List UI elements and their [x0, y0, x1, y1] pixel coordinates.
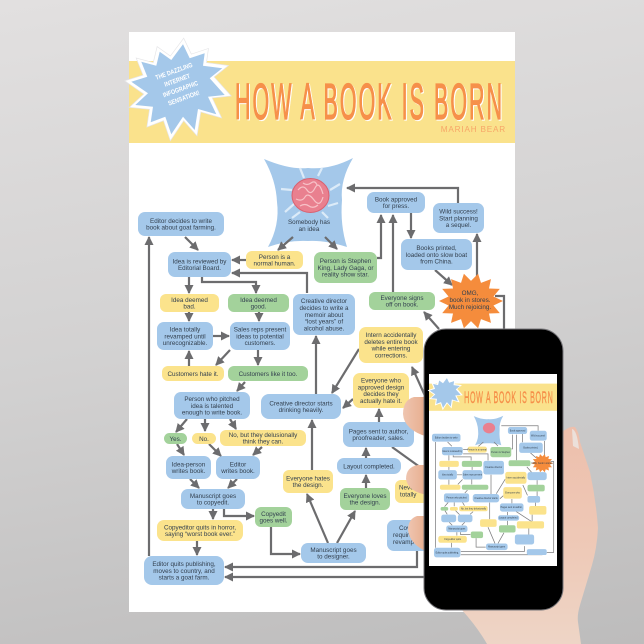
box: books printed: loaded onto slow boat — [406, 252, 467, 259]
box: copyedit well — [255, 507, 292, 527]
arrow: bad to revamp — [188, 312, 190, 321]
badge text — [155, 62, 203, 109]
box: idea-person writes: writes book. — [171, 468, 206, 475]
arrow: revamp to sales reps — [213, 335, 229, 337]
arrow: delusional to editor writes — [253, 447, 262, 455]
starburst: book in stores: OMG, — [462, 290, 479, 297]
box: everyone hates — [283, 470, 333, 493]
box: idea good: Idea deemed — [240, 297, 277, 304]
arrow: creative director back to review — [232, 273, 307, 293]
phone screen: mini poster: Everyone who — [505, 492, 521, 494]
box: delusional: No, but they delusionally — [229, 432, 298, 439]
box: idea revamped: revamped until — [164, 333, 206, 340]
palm and thumb — [462, 427, 598, 644]
phone screen: mini poster: Copyeditor quits — [444, 538, 462, 541]
box: books printed: from China. — [420, 259, 453, 266]
badge text: INTERNET — [164, 73, 191, 89]
box: cover (partly hidden) — [387, 520, 447, 551]
starburst badge — [125, 38, 231, 141]
box: goat farm: moves to country, and — [153, 568, 215, 575]
box: wild success: Wild success! — [439, 208, 478, 216]
box: memoir: decides to write a — [299, 305, 349, 312]
box: editor decides: Editor decides to write — [150, 218, 212, 225]
arrow: signs off to approved — [392, 215, 394, 292]
box: editor decides — [138, 212, 224, 236]
starburst: book in stores: book in stores. — [450, 297, 491, 304]
phone screen: mini poster: Creative director — [485, 466, 502, 469]
title: HOW A BOOK IS BORN — [236, 76, 505, 132]
box: editorial board: Idea is reviewed by — [173, 258, 227, 265]
phone screen: mini poster: HOW A BOOK IS BORN — [464, 387, 553, 407]
box: books printed — [401, 239, 472, 270]
arrow: burst to normal human — [278, 237, 293, 250]
box: pages sent: proofreader, sales. — [352, 435, 405, 442]
box: signs off: off on book. — [386, 302, 419, 309]
box: designer — [301, 543, 366, 563]
title: HOW A BOOK IS BORN — [235, 75, 504, 131]
arrow: manuscript to copyeditor quits — [212, 509, 214, 519]
box: intern: Intern accidentally — [366, 332, 417, 339]
arrow: pitcher to yes — [176, 419, 187, 432]
box: approved for press: for press. — [383, 203, 409, 210]
box: yes: Yes. — [169, 436, 182, 443]
box: everyone loves — [340, 488, 390, 510]
box: idea good — [228, 294, 289, 312]
arrow: pitcher to no — [204, 419, 206, 431]
phone screen: mini poster: Manuscript goes — [488, 545, 506, 548]
box: pitcher talented: Person who pitched — [184, 396, 240, 403]
box: pitcher talented: enough to write book. — [182, 410, 242, 417]
arrow: hidden box to signs off — [424, 312, 439, 329]
box: cover (partly hidden): Cover — [399, 525, 416, 532]
box: sales reps: Sales reps present — [234, 326, 286, 334]
arrow: designer to loves — [337, 511, 355, 543]
box: no: No. — [199, 436, 209, 443]
box: signs off — [369, 292, 435, 310]
box: drinking heavily — [261, 394, 341, 419]
arrow: good to sales reps — [258, 312, 260, 321]
box: yes — [164, 433, 187, 444]
arrow: copyedit well to designer — [271, 527, 300, 554]
box: customers hate — [162, 366, 224, 381]
arrow: store line to right — [495, 296, 504, 332]
box: celebrity — [314, 252, 377, 283]
box: intern: deletes entire book — [364, 339, 418, 346]
icon: brain — [292, 178, 329, 212]
starburst: book in stores: Much rejoicing. — [449, 304, 491, 311]
phone screen: mini poster: Sales reps present — [463, 473, 482, 476]
hand — [403, 397, 598, 644]
box: editorial board — [168, 252, 231, 277]
phone screen: mini poster: Idea is reviewed by — [442, 451, 463, 453]
box: copyeditor quits — [157, 520, 243, 541]
box: manuscript to copyedit — [181, 489, 245, 509]
author: MARIAH BEAR — [441, 125, 506, 134]
arrow: review to bad — [188, 277, 190, 293]
box: drinking heavily: drinking heavily. — [279, 407, 324, 414]
box: editor writes — [216, 456, 260, 479]
box: idea revamped: Idea totally — [170, 326, 201, 334]
finger 1 — [403, 397, 428, 437]
box: sales reps: customers. — [245, 340, 276, 347]
idea burst with brain: an idea — [299, 226, 320, 233]
arrow: editor writes to manuscript — [228, 479, 237, 488]
starburst: book in stores — [439, 274, 503, 328]
box: manuscript to copyedit: to copyedit. — [197, 500, 229, 507]
arrow: layout to pages — [365, 448, 367, 458]
phone screen: mini poster: Person is Stephen — [491, 451, 511, 454]
box: pitcher talented — [174, 392, 250, 419]
arrow: sequel to burst — [347, 188, 458, 203]
box: normal human: normal human. — [254, 261, 296, 268]
arrow: hate it to creative director — [343, 399, 353, 408]
box: normal human: Person is a — [259, 254, 291, 261]
box: approved for press: Book approved — [375, 196, 418, 203]
arrow: intern to drinking — [332, 349, 359, 393]
finger 2 — [406, 465, 428, 495]
arrow: pages to hate it — [378, 409, 380, 422]
box: memoir: Creative director — [301, 298, 347, 305]
box: customers like: Customers like it too. — [239, 371, 298, 378]
arrow: pitcher to delusional — [230, 419, 236, 429]
box: copyedit well: Copyedit — [261, 511, 286, 518]
box: actually hate it — [353, 373, 409, 408]
phone screen: mini poster: Books printed, — [523, 447, 539, 450]
badge text: SENSATION! — [167, 90, 201, 108]
phone screen: mini poster: Intern accidentally — [507, 476, 526, 479]
box: idea bad: Idea deemed — [171, 297, 208, 304]
phone screen: mini poster: Editor quits publishing, — [436, 551, 459, 554]
box: everyone hates: Everyone hates — [286, 475, 330, 482]
arrow: celebrity to approved — [377, 215, 381, 258]
box: celebrity: reality show star. — [322, 272, 369, 279]
phone screen: mini poster: Layout completed. — [499, 517, 518, 520]
arrow: customers hate to revamp — [188, 351, 190, 366]
box: everyone hates: the design. — [293, 482, 324, 489]
box: customers like — [228, 366, 308, 381]
arrow: review to good — [202, 277, 256, 293]
box: intern — [359, 327, 423, 363]
box: actually hate it: actually hate it. — [360, 398, 402, 405]
arrow: copyeditor quits to goat farm — [196, 541, 198, 555]
arrow: pages to never — [392, 447, 424, 470]
arrow: printed to store — [435, 270, 452, 285]
phone screen: mini poster — [428, 374, 557, 566]
box: designer: to designer. — [317, 554, 350, 561]
box: actually hate it: decides they — [363, 391, 400, 398]
box: editor decides: book about goat farming. — [146, 225, 216, 232]
box: idea revamped: unrecognizable. — [163, 340, 207, 347]
arrow: hidden box to intern — [412, 367, 426, 398]
box: actually hate it: Everyone who — [361, 378, 401, 384]
box: goat farm: Editor quits publishing, — [152, 561, 216, 568]
box: signs off: Everyone signs — [380, 295, 424, 302]
box: sales reps — [230, 322, 290, 350]
box: editor writes: writes book. — [220, 468, 255, 475]
phone screen: mini poster: Person is a normal — [467, 450, 487, 452]
phone screen: mini poster: Manuscript goes — [448, 528, 466, 531]
box: idea-person writes: Idea-person — [172, 461, 206, 468]
arrow: approved to printed — [410, 213, 412, 238]
phone screen: mini poster: No, but they delusionally — [461, 507, 487, 510]
phone screen: mini poster: Pages sent to author, — [501, 506, 523, 509]
box: manuscript to copyedit: Manuscript goes — [190, 493, 236, 500]
phone screen: mini poster: Creative director starts — [474, 497, 499, 500]
arrow: sales to customers like — [257, 350, 259, 365]
box: delusional: think they can. — [243, 439, 284, 446]
box: customers hate: Customers hate it. — [167, 371, 219, 378]
box: cover (partly hidden): requires — [393, 532, 416, 539]
box: wild success: Start planning — [439, 215, 478, 222]
box: approved for press — [367, 192, 425, 213]
box: celebrity: Person is Stephen — [320, 258, 372, 265]
box: intern: while entering — [371, 346, 411, 353]
box: never (partly hidden): Never — [399, 484, 416, 492]
box: editorial board: Editorial Board. — [178, 265, 221, 272]
phone screen: mini poster: Editor decides to write — [435, 436, 458, 439]
arrow: manuscript to copyedit well — [224, 509, 254, 516]
badge text: THE DAZZLING — [155, 62, 194, 82]
phone screen: mini poster: Book approved — [510, 430, 526, 432]
box: memoir — [293, 294, 355, 335]
arrow: yes to idea-person — [177, 444, 184, 455]
arrow: designer to hates — [307, 494, 328, 543]
box: delusional — [220, 430, 306, 446]
thumbnail — [572, 429, 579, 449]
box: editor writes: Editor — [230, 461, 246, 468]
box: idea good: good. — [251, 304, 267, 311]
box: actually hate it: approved design — [358, 384, 405, 391]
box: everyone loves: the design. — [350, 500, 381, 507]
phone screen: mini poster: Idea totally — [442, 473, 454, 476]
finger 3 — [408, 516, 428, 552]
banner — [129, 61, 515, 143]
arrow: loves to layout — [365, 475, 367, 488]
box: layout: Layout completed. — [343, 463, 395, 470]
arrow: lower line into goat farm — [225, 576, 430, 578]
box: idea-person writes — [166, 456, 211, 479]
box: wild success: a sequel. — [446, 222, 472, 229]
arrow: hates to creative director — [311, 420, 313, 470]
phone screen: mini poster: Person who pitched — [446, 497, 467, 500]
phone — [424, 329, 563, 610]
arrow: normal human to review — [232, 259, 246, 261]
box: goat farm — [144, 556, 224, 585]
arrow: sales to customers hate — [216, 350, 230, 365]
arrow: editor to review — [185, 237, 198, 250]
box: pages sent — [343, 422, 414, 447]
box: cover (partly hidden): revamp — [393, 539, 414, 546]
arrow: no to editor writes — [209, 444, 221, 456]
box: idea revamped — [157, 322, 213, 350]
box: never (partly hidden) — [395, 480, 455, 503]
box: normal human — [246, 251, 303, 269]
badge text: INFOGRAPHIC — [162, 80, 200, 99]
box: wild success — [433, 203, 484, 233]
box: memoir: memoir about — [305, 312, 343, 319]
arrow: drinking to memoir — [315, 336, 317, 394]
box: pitcher talented: idea is talented — [191, 403, 234, 410]
box: copyedit well: goes well. — [259, 518, 288, 525]
poster — [125, 32, 515, 612]
box: sales reps: ideas to potential — [236, 333, 284, 340]
idea burst with brain — [264, 158, 353, 247]
box: drinking heavily: Creative director starts — [269, 400, 333, 407]
box: goat farm: starts a goat farm. — [159, 575, 210, 582]
box: celebrity: King, Lady Gaga, or — [317, 265, 374, 272]
box: designer: Manuscript goes — [310, 547, 357, 554]
arrow: idea-person to manuscript — [190, 479, 199, 488]
box: intern: corrections. — [375, 352, 408, 359]
phone screen: mini poster: OMG, book in stores. — [531, 462, 553, 465]
box: idea bad: bad. — [183, 304, 196, 311]
phone screen: mini poster: Wild success! — [531, 435, 546, 437]
arrow: burst to celebrity — [325, 237, 337, 249]
arrow: goat farm up to editor — [148, 237, 150, 556]
box: never (partly hidden): totally — [400, 492, 417, 498]
arrow: upper line into goat farm — [225, 551, 417, 567]
box: memoir: “lost years” of — [305, 319, 343, 326]
box: no — [192, 433, 216, 444]
box: books printed: Books printed, — [416, 245, 457, 252]
arrow: store to sequel — [476, 234, 478, 276]
idea burst with brain: Somebody has — [288, 219, 330, 226]
box: everyone loves: Everyone loves — [343, 493, 387, 500]
box: pages sent: Pages sent to author, — [349, 428, 409, 435]
box: copyeditor quits: Copyeditor quits in horror, — [164, 524, 236, 531]
box: copyeditor quits: saying “worst book ever.” — [165, 531, 235, 538]
arrow: customers like to pitcher — [237, 382, 245, 391]
box: layout — [337, 458, 401, 474]
box: idea bad — [160, 294, 219, 312]
box: memoir: alcohol abuse. — [304, 325, 345, 332]
